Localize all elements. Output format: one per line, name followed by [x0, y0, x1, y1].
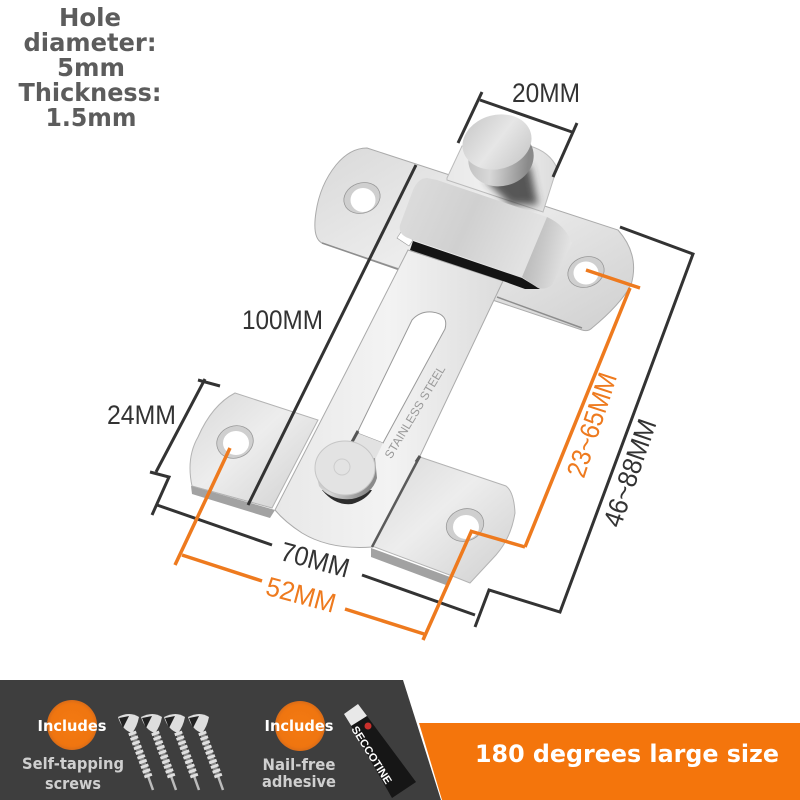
pin shadow [485, 165, 538, 205]
includes adhesive badge: Includes [264, 717, 334, 735]
hole bottom left [212, 421, 258, 463]
top-left spec text: diameter: [24, 28, 156, 57]
banner text: 180 degrees large size [475, 740, 779, 768]
top-left spec text [18, 3, 162, 132]
seam [372, 456, 420, 547]
top-left spec text: 1.5mm [46, 103, 136, 132]
top-left spec text: 5mm [57, 53, 125, 82]
nail-free adhesive label [262, 755, 336, 791]
top pin tab [447, 146, 557, 212]
includes screws badge: Includes [38, 717, 107, 735]
label 100MM: 100MM [242, 305, 323, 335]
plate thickness edges [191, 486, 275, 518]
label 70MM: 70MM [277, 536, 353, 584]
dimension lines dark [150, 92, 693, 627]
self-tapping screws label: Self-tapping [22, 754, 124, 773]
nail-free adhesive label: adhesive [262, 772, 336, 791]
top-left spec text: Hole [59, 3, 121, 32]
top-left spec text: Thickness: [18, 78, 162, 107]
bottom orange banner [419, 723, 800, 800]
dimension lines orange [175, 270, 640, 640]
self-tapping screws label: screws [45, 774, 101, 793]
label 24MM: 24MM [107, 400, 176, 430]
pin knob [456, 107, 540, 194]
label 46~88MM: 46~88MM [598, 415, 662, 531]
icon: screws [118, 714, 223, 790]
top mounting plate [315, 148, 634, 331]
bracket over arm [397, 178, 572, 289]
icon: adhesive tube [344, 704, 416, 798]
bottom dark panel [0, 680, 441, 800]
label 23~65MM: 23~65MM [561, 369, 623, 481]
latch product illustration [190, 107, 634, 585]
nail-free adhesive label: Nail-free [262, 755, 336, 774]
slot [357, 312, 446, 443]
label 52MM: 52MM [263, 571, 339, 619]
self-tapping screws label [22, 754, 124, 793]
includes screws badge [38, 700, 107, 750]
engraving: STAINLESS STEEL [382, 363, 448, 461]
plate through slot [340, 433, 383, 466]
bottom mounting plate right part [372, 457, 515, 583]
label 20MM: 20MM [512, 78, 580, 108]
hole top left [339, 178, 385, 218]
icon: adhesive tube: SECCOTINE [348, 724, 394, 787]
bottom knob [315, 441, 377, 504]
sliding arm with slot [190, 250, 515, 585]
hole bottom right [442, 503, 488, 547]
includes adhesive badge [264, 701, 334, 751]
hole right [563, 252, 609, 292]
